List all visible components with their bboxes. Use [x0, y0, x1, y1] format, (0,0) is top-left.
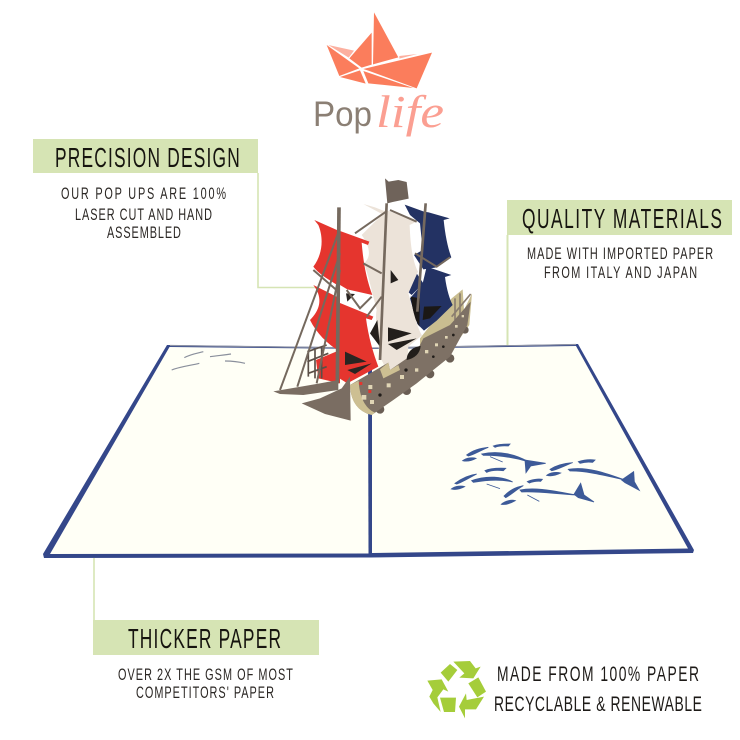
- logo wordmark: [313, 86, 444, 137]
- description: [527, 244, 713, 282]
- top edge softening: [170, 344, 576, 348]
- heading band: [507, 200, 732, 235]
- description: OVER 2X THE GSM OF MOST: [118, 665, 293, 684]
- logo wordmark: Pop: [313, 95, 372, 134]
- bow and bowsprit: [273, 377, 351, 421]
- description: MADE WITH IMPORTED PAPER: [527, 244, 713, 263]
- description: LASER CUT AND HAND: [75, 205, 212, 224]
- pirate flag: [385, 178, 409, 203]
- hull cream deck strip: [380, 363, 400, 378]
- connector lines: [94, 173, 508, 620]
- hull windows: [362, 315, 464, 404]
- pop-up pirate ship: [273, 178, 472, 423]
- recyclable statement: MADE FROM 100% PAPER: [497, 662, 699, 686]
- description: ASSEMBLED: [107, 223, 181, 242]
- navy sails: [400, 205, 453, 331]
- flying birds: [172, 352, 245, 370]
- recyclable statement: RECYCLABLE & RENEWABLE: [494, 692, 702, 716]
- dark interior patches: [411, 297, 442, 327]
- heading: QUALITY MATERIALS: [522, 203, 722, 234]
- dark sail cut-outs: [345, 293, 372, 374]
- heading: THICKER PAPER: [128, 623, 281, 654]
- dolphin 1: [463, 444, 546, 473]
- dolphin 3: [547, 460, 639, 490]
- dolphin 4: [501, 479, 594, 504]
- heading band: [93, 620, 319, 655]
- heading: PRECISION DESIGN: [55, 142, 240, 173]
- callout: precision design: [33, 139, 258, 242]
- card navy edge: [43, 344, 694, 558]
- right card panel: [372, 346, 688, 553]
- dolphins: [451, 444, 639, 504]
- description: [61, 184, 226, 242]
- ship rigging: [280, 203, 450, 390]
- dolphin 2: [451, 468, 513, 489]
- left card panel: [50, 347, 368, 554]
- open pop-up card: [43, 344, 694, 558]
- recyclable statement: [494, 662, 702, 716]
- hull gun ports: [378, 334, 455, 397]
- hull red accents: [359, 382, 371, 393]
- card spine under ship: [366, 410, 374, 423]
- rear deck lattice: [452, 293, 471, 323]
- ship hull: [350, 302, 471, 415]
- red sails: [310, 220, 378, 383]
- icon: origami paper boat: [327, 12, 432, 88]
- hull scallops: [376, 326, 469, 414]
- icon: recycling arrows: [427, 661, 486, 718]
- callout: thicker paper: [93, 620, 319, 702]
- white sail: [362, 204, 422, 377]
- callout: quality materials: [507, 200, 732, 282]
- stern railing grid: [307, 345, 328, 378]
- description: FROM ITALY AND JAPAN: [544, 263, 697, 282]
- description: [118, 665, 293, 702]
- hull cream bow strip: [350, 381, 375, 415]
- heading band: [33, 139, 258, 173]
- logo wordmark: life: [376, 86, 444, 137]
- rear deck cream backing: [420, 289, 472, 357]
- description: OUR POP UPS ARE 100%: [61, 184, 226, 203]
- description: COMPETITORS' PAPER: [136, 683, 274, 702]
- white sail cut-outs: [370, 270, 417, 350]
- logo: Poplife: [313, 12, 444, 137]
